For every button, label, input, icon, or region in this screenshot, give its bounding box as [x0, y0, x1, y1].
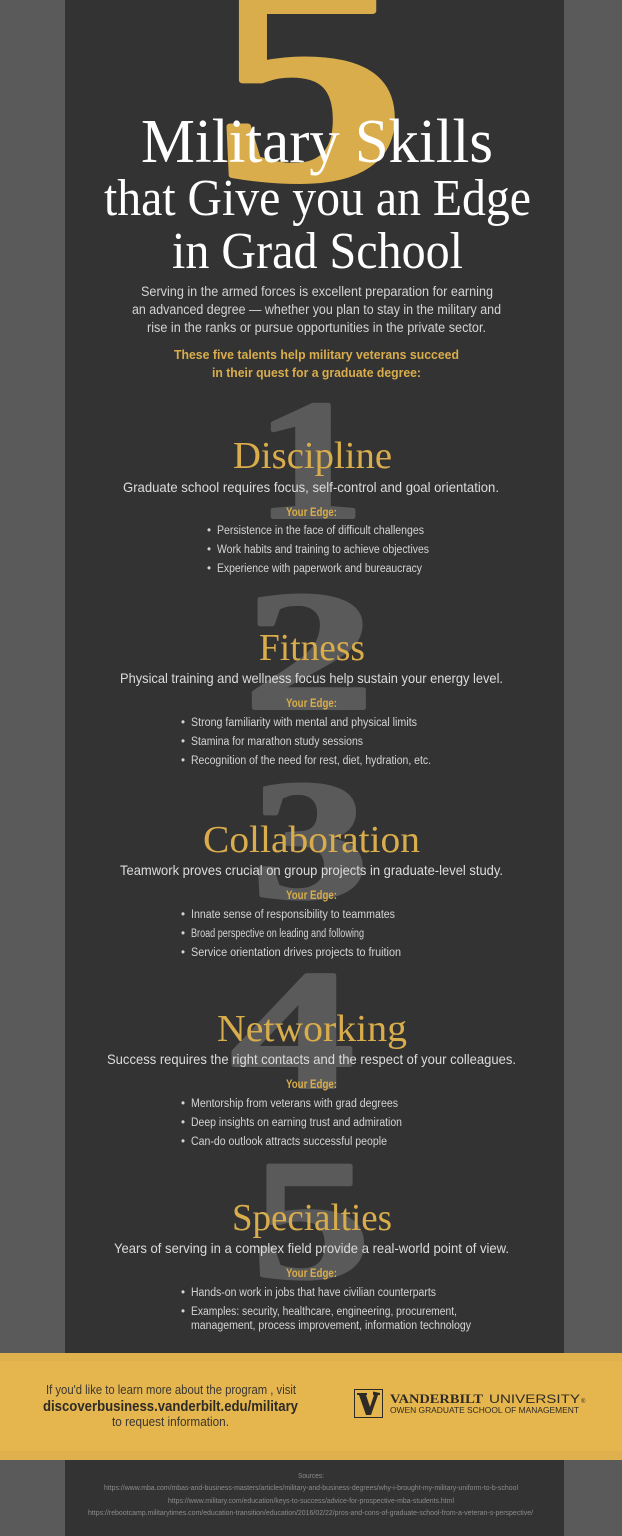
bullet list: •	[181, 755, 185, 767]
description: Years of serving in a complex field provide a real-world point of view.	[114, 1240, 509, 1256]
heading: specialties: Specialties	[232, 1197, 392, 1239]
bullet list	[181, 717, 431, 767]
panel: specialties	[114, 1126, 509, 1332]
intro text: an advanced degree — whether you plan to stay in the military and	[132, 302, 501, 317]
bullet list: Innate sense of responsibility to teammates	[191, 909, 395, 921]
numeral 5: 5	[252, 1126, 370, 1314]
call to action: discoverbusiness.vanderbilt.edu/military	[43, 1398, 299, 1415]
panel: discipline	[123, 366, 499, 575]
logo: vanderbilt university: UNIVERSITY	[489, 1392, 580, 1406]
bullet list: •	[181, 736, 185, 748]
bullet list: Strong familiarity with mental and physical limits	[191, 717, 417, 729]
heading: discipline: Discipline	[233, 435, 392, 477]
bullet list: Mentorship from veterans with grad degrees	[191, 1098, 398, 1110]
bullet list: Work habits and training to achieve objectives	[217, 544, 429, 556]
bullet list: Hands-on work in jobs that have civilian counterparts	[191, 1287, 436, 1299]
sources: https://rebootcamp.militarytimes.com/education-transition/education/2016/02/22/pros-and-cons-of-graduate-school-from-a-veteran-s-perspective/	[88, 1510, 533, 1517]
bullet list: •	[181, 1306, 185, 1318]
bullet list: Examples: security, healthcare, engineering, procurement,	[191, 1306, 457, 1318]
bullet list: Broad perspective on leading and following	[191, 928, 364, 940]
gold lead-in text	[174, 347, 459, 380]
description: Teamwork proves crucial on group projects in graduate-level study.	[120, 862, 503, 878]
bullet list	[181, 909, 401, 959]
numeral 1: 1	[256, 366, 364, 554]
bullet list: •	[181, 1287, 185, 1299]
your edge label: Your Edge:	[286, 698, 337, 710]
bullet list: •	[181, 1098, 185, 1110]
wordmark: VANDERBILT	[390, 1391, 483, 1406]
bullet list	[181, 1287, 471, 1332]
your edge label: Your Edge:	[286, 890, 337, 902]
intro text: Serving in the armed forces is excellent preparation for earning	[141, 284, 493, 299]
intro text	[132, 284, 501, 335]
bullet list: •	[181, 928, 185, 940]
icon: V mark	[354, 1390, 382, 1418]
sources: https://www.military.com/education/keys-to-success/advice-for-prospective-mba-students.html	[168, 1498, 454, 1505]
title: in Grad School	[172, 223, 463, 280]
bullet list: •	[181, 947, 185, 959]
numeral 3: 3	[252, 746, 368, 934]
bullet list: Experience with paperwork and bureaucracy	[217, 563, 422, 575]
bullet list: Deep insights on earning trust and admiration	[191, 1117, 402, 1129]
gold lead-in text: in their quest for a graduate degree:	[212, 365, 421, 380]
bullet list: •	[207, 563, 211, 575]
heading: collaboration: Collaboration	[203, 819, 420, 861]
bullet list: Can-do outlook attracts successful people	[191, 1136, 387, 1148]
panel: networking	[107, 936, 516, 1148]
bullet list: •	[207, 544, 211, 556]
sources: https://www.mba.com/mbas-and-business-masters/articles/military-and-business-degrees/why-i-brought-my-military-uniform-to-b-school	[104, 1485, 518, 1492]
logo: vanderbilt university	[354, 1390, 586, 1418]
bullet list: Recognition of the need for rest, diet, hydration, etc.	[191, 755, 431, 767]
logo: vanderbilt university: ®	[581, 1398, 586, 1405]
bullet list: Persistence in the face of difficult challenges	[217, 525, 424, 537]
logo: vanderbilt university: OWEN GRADUATE SCHOOL OF MANAGEMENT	[390, 1406, 579, 1415]
bullet list: •	[181, 717, 185, 729]
gold lead-in text: These five talents help military veterans succeed	[174, 347, 459, 362]
your edge label: Your Edge:	[286, 507, 337, 519]
numeral 2: 2	[244, 557, 374, 745]
your edge label: Your Edge:	[286, 1268, 337, 1280]
footer band	[0, 1353, 622, 1460]
your edge label: Your Edge:	[286, 1079, 337, 1091]
call to action: If you'd like to learn more about the program , visit	[46, 1382, 296, 1397]
sources	[88, 1473, 533, 1517]
title: that Give you an Edge	[104, 170, 531, 227]
call to action	[43, 1382, 299, 1429]
panel: collaboration	[120, 746, 503, 959]
intro text: rise in the ranks or pursue opportunities in the private sector.	[147, 320, 486, 335]
title	[104, 108, 531, 280]
bullet list: •	[207, 525, 211, 537]
description: Physical training and wellness focus help sustain your energy level.	[120, 670, 503, 686]
numeral 4: 4	[231, 936, 354, 1124]
sources: Sources:	[298, 1473, 324, 1480]
heading: fitness: Fitness	[259, 627, 365, 669]
bullet list	[207, 525, 429, 575]
bullet list: •	[181, 1117, 185, 1129]
bullet list: Stamina for marathon study sessions	[191, 736, 363, 748]
heading: networking: Networking	[217, 1008, 407, 1050]
panel: fitness	[120, 557, 503, 767]
bullet list: management, process improvement, information technology	[191, 1320, 471, 1332]
description: Success requires the right contacts and the respect of your colleagues.	[107, 1051, 516, 1067]
bullet list	[181, 1098, 402, 1148]
bullet list: Service orientation drives projects to fruition	[191, 947, 401, 959]
bullet list: •	[181, 909, 185, 921]
description: Graduate school requires focus, self-control and goal orientation.	[123, 479, 499, 495]
title: Military Skills	[141, 108, 493, 176]
call to action: to request information.	[112, 1414, 229, 1429]
bullet list: •	[181, 1136, 185, 1148]
